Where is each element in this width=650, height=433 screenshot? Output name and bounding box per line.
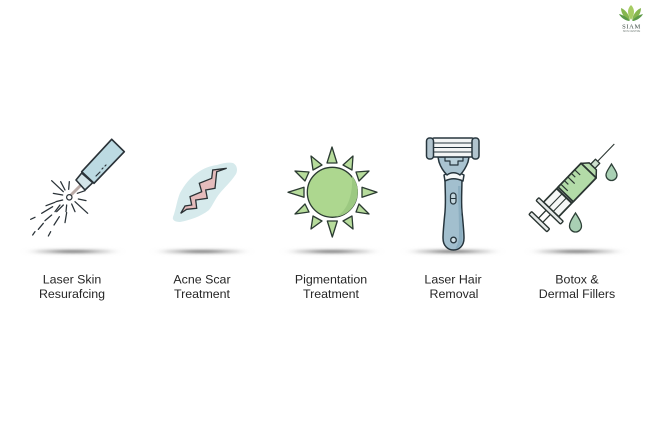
- label: Pigmentation Treatment: Pigmentation: [295, 272, 367, 286]
- label: Pigmentation Treatment: Treatment: [303, 287, 360, 301]
- ground shadows: darker core: [53, 250, 597, 253]
- label: Laser Skin Resurafcing: Laser Skin: [43, 272, 101, 286]
- label: Botox and Dermal Fillers: [539, 272, 615, 301]
- label: Botox and Dermal Fillers: Botox &: [555, 272, 599, 286]
- icon: laser pen with sparks: [31, 139, 124, 236]
- icon: razor: [426, 138, 479, 250]
- label: Botox and Dermal Fillers: Dermal Fillers: [539, 287, 615, 301]
- label: Acne Scar Treatment: Acne Scar: [173, 272, 231, 286]
- label: Laser Skin Resurafcing: [39, 272, 105, 301]
- label: Acne Scar Treatment: [173, 272, 231, 301]
- label: Acne Scar Treatment: Treatment: [174, 287, 231, 301]
- logo: Siam lotus: [619, 5, 643, 33]
- label: Pigmentation Treatment: [295, 272, 367, 301]
- label: Laser Hair Removal: Removal: [430, 287, 478, 301]
- logo: Siam lotus: SKIN CENTRE: [623, 29, 640, 33]
- label: Laser Hair Removal: Laser Hair: [424, 272, 482, 286]
- ground shadows: soft wide layer: [33, 250, 617, 254]
- label: Laser Hair Removal: [424, 272, 482, 301]
- label: Laser Skin Resurafcing: Resurafcing: [39, 287, 105, 301]
- icon: syringe with droplets: [526, 132, 627, 235]
- icon: acne scar on skin patch: [173, 163, 237, 222]
- icon: green sun: [288, 147, 377, 237]
- logo: Siam lotus: SIAM: [622, 24, 641, 30]
